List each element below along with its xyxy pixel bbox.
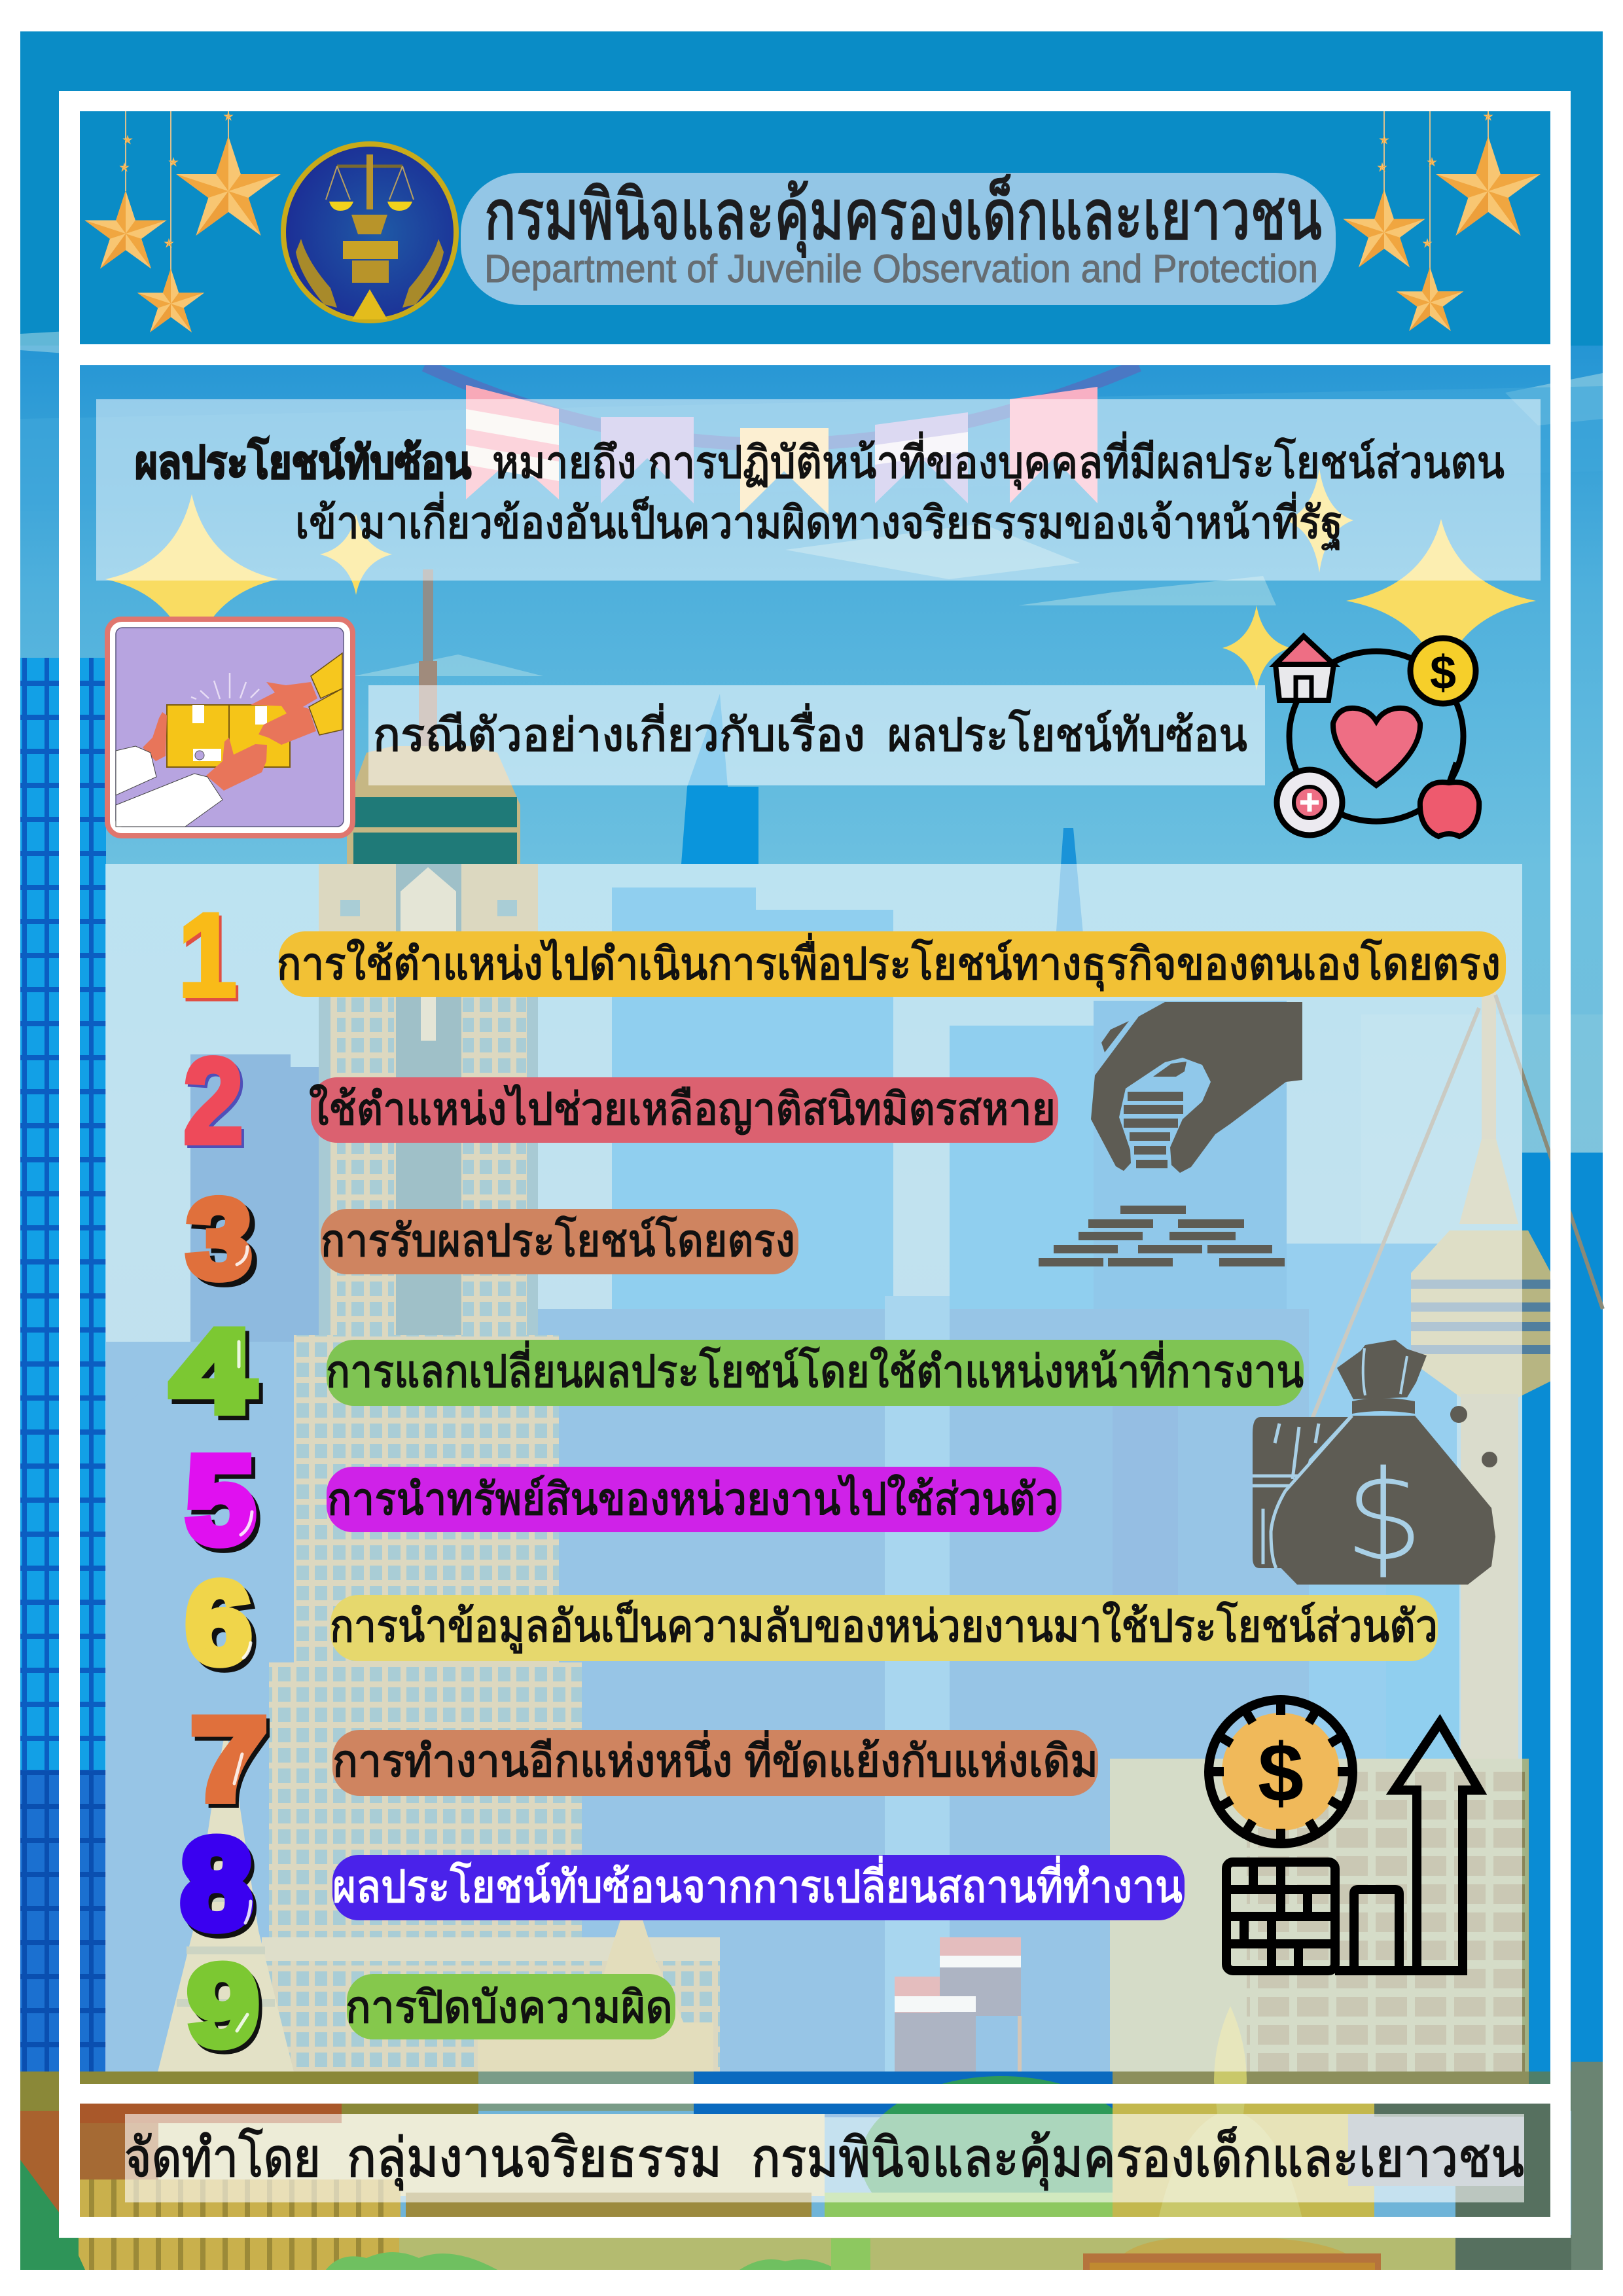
icon: growth chart with coin [1209, 1700, 1479, 1971]
list item 7: 7 [194, 1698, 270, 1828]
illustration: parcel handover [107, 619, 353, 836]
icon: money bag: $ [1345, 1444, 1423, 1588]
apple [1420, 762, 1479, 836]
title pill [461, 173, 1336, 305]
list item 6: 6 [190, 1564, 256, 1692]
footer band [124, 2114, 1524, 2202]
header decoration: hanging stars left [84, 111, 281, 332]
list item 2: ใช้ตำแหน่งไปช่วยเหลือญาติสนิทมิตรสหาย [309, 1084, 1056, 1134]
heart [1333, 708, 1420, 785]
icon: money bag [1253, 1340, 1497, 1588]
definition line 2: เข้ามาเกี่ยวข้องอันเป็นความผิดทางจริยธรรมของเจ้าหน้าที่รัฐ [295, 492, 1343, 550]
medical cross [1277, 770, 1342, 835]
list item 9: 9 [188, 1941, 259, 2069]
list item 9: 9 [191, 1945, 262, 2073]
bars [1354, 1890, 1399, 1971]
header decoration: hanging stars right [1343, 111, 1541, 331]
central tower [157, 569, 720, 2088]
title english: Department of Juvenile Observation and Protection [484, 247, 1318, 291]
sparkle stars [105, 468, 1536, 691]
list item 5: 5 [190, 1435, 259, 1574]
list item 1: การใช้ตำแหน่งไปดำเนินการเพื่อประโยชน์ทางธุรกิจของตนเองโดยตรง [277, 933, 1501, 991]
example heading text: กรณีตัวอย่างเกี่ยวกับเรื่อง [373, 704, 865, 761]
large list panel [105, 864, 1522, 2072]
definition panel [96, 399, 1541, 581]
list item 7: การทำงานอีกแห่งหนึ่ง ที่ขัดแย้งกับแห่งเดิม [332, 1731, 1098, 1786]
icon: hand placing coin stack [1091, 1002, 1302, 1173]
list item 6 [186, 1559, 1438, 1692]
ground and temples [20, 2006, 1603, 2270]
department seal [283, 144, 456, 321]
header band [79, 111, 1551, 345]
list item 5: การนำทรัพย์สินของหน่วยงานไปใช้ส่วนตัว [327, 1474, 1058, 1524]
list item 4: 4 [175, 1310, 258, 1441]
right tower [1309, 988, 1603, 1983]
right arm [251, 653, 342, 745]
list item 1 [178, 888, 1506, 1025]
list item 4 [171, 1306, 1304, 1441]
definition line 1: หมายถึง การปฏิบัติหน้าที่ของบุคคลที่มีผลประโยชน์ส่วนตน [492, 432, 1505, 490]
coin [1209, 1700, 1353, 1844]
definition term: ผลประโยชน์ทับซ้อน [135, 437, 471, 488]
footer text part 1: จัดทำโดย [124, 2128, 321, 2188]
list item 5 [186, 1431, 1061, 1574]
list item 4: 4 [171, 1306, 254, 1436]
bunting flags [425, 365, 1139, 514]
right building [1110, 1759, 1529, 2086]
coin [1410, 638, 1476, 704]
left arm [116, 712, 267, 827]
list item 3 [187, 1176, 798, 1306]
list item 6: การนำข้อมูลอันเป็นความลับของหน่วยงานมาใช้ประโยชน์ส่วนตัว [330, 1600, 1438, 1653]
list item 2 [183, 1033, 1058, 1172]
coin: $ [1258, 1727, 1304, 1819]
list item 3: การรับผลประโยชน์โดยตรง [321, 1215, 795, 1266]
list item 9: การปิดบังความผิด [346, 1982, 673, 2032]
list item 9 [188, 1941, 675, 2073]
list item 1: 1 [178, 888, 237, 1022]
title thai: กรมพินิจและคุ้มครองเด็กและเยาวชน [484, 174, 1322, 257]
list item 1: 1 [181, 891, 240, 1025]
brick block [1226, 1862, 1467, 1971]
list item 8: 8 [181, 1813, 252, 1955]
list item 4: การแลกเปลี่ยนผลประโยชน์โดยใช้ตำแหน่งหน้าที่การงาน [326, 1341, 1304, 1397]
coin: $ [1430, 647, 1456, 699]
sparkle lines [191, 673, 259, 699]
list item 8 [181, 1813, 1185, 1960]
list item 2: 2 [186, 1036, 246, 1172]
list item 6: 6 [186, 1559, 251, 1687]
footer text part 2: กลุ่มงานจริยธรรม [347, 2128, 722, 2191]
example heading term: ผลประโยชน์ทับซ้อน [887, 709, 1247, 761]
parcel [167, 705, 290, 767]
list item 3: 3 [192, 1181, 257, 1306]
arrow [1395, 1723, 1479, 1971]
distant city [105, 694, 1459, 2075]
list item 8: 8 [185, 1818, 255, 1960]
icon: brick pile [1039, 1206, 1285, 1266]
list item 7 [191, 1694, 1098, 1828]
list item 5: 5 [186, 1431, 255, 1570]
icon: health and wealth ring [1275, 636, 1479, 836]
list item 3: 3 [187, 1176, 252, 1302]
house [1275, 636, 1334, 700]
buddha figure [1158, 2006, 1302, 2219]
left glass tower [20, 658, 106, 1770]
thai flags [895, 1937, 1022, 2225]
list item 8: ผลประโยชน์ทับซ้อนจากการเปลี่ยนสถานที่ทำงาน [332, 1856, 1183, 1912]
footer text part 3: กรมพินิจและคุ้มครองเด็กและเยาวชน [751, 2126, 1524, 2191]
list item 7: 7 [191, 1694, 267, 1824]
list item 2: 2 [183, 1033, 243, 1169]
example heading band [368, 685, 1265, 785]
